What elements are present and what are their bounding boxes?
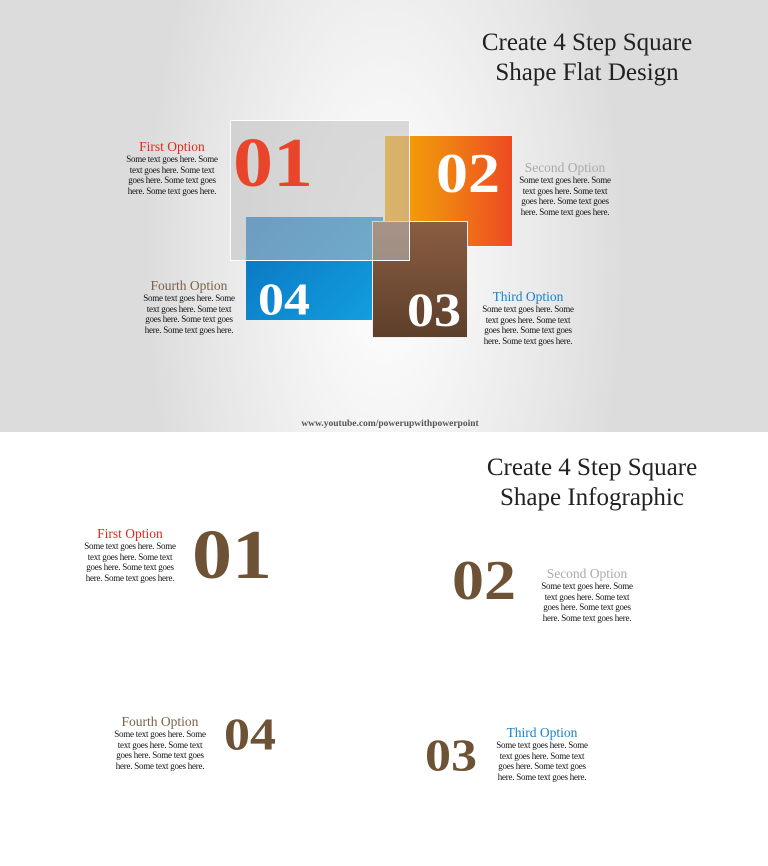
text: fourth option bottom: here. Some text goes here. (116, 761, 204, 771)
text: fourth option bottom: Some text goes here. Some (114, 729, 206, 739)
text: second option: goes here. Some text goes (521, 196, 609, 206)
text: second option (519, 160, 611, 217)
text: second option bottom: text goes here. Some text (545, 592, 629, 602)
title top: Create 4 Step Square Shape Flat Design (482, 29, 692, 86)
square: gray 01 (230, 120, 410, 261)
text: second option bottom: here. Some text goes here. (543, 613, 631, 623)
text: second option bottom: goes here. Some text goes (543, 602, 631, 612)
text: third option bottom: Third Option (507, 725, 577, 740)
square: orange 02 (385, 136, 512, 246)
text: first option bottom (84, 526, 176, 583)
text: fourth option bottom (114, 714, 206, 771)
number 02: 02 (436, 142, 500, 204)
text: first option: text goes here. Some text (130, 165, 214, 175)
text: third option: here. Some text goes here. (484, 336, 572, 346)
number 04 bottom: 04 (224, 710, 276, 760)
text: second option bottom: Second Option (547, 566, 627, 581)
url: www.youtube.com/powerupwithpowerpoint (301, 419, 479, 429)
number 03 bottom: 03 (425, 731, 477, 781)
text: third option bottom: text goes here. Some text (500, 751, 584, 761)
text: first option bottom: Some text goes here. Some (84, 541, 176, 551)
number 04: 04 (258, 275, 310, 325)
text: first option bottom: goes here. Some text goes (86, 562, 174, 572)
title bottom: Create 4 Step Square Shape Infographic (487, 454, 697, 511)
text: fourth option: here. Some text goes here. (145, 325, 233, 335)
text: third option: Third Option (493, 289, 563, 304)
text: third option bottom (496, 725, 588, 782)
text: first option bottom: text goes here. Some text (88, 552, 172, 562)
text: first option: First Option (139, 139, 205, 154)
text: fourth option: Some text goes here. Some (143, 293, 235, 303)
panel: top flat design (0, 0, 768, 432)
square: brown 03 (372, 221, 468, 338)
text: second option: Some text goes here. Some (519, 175, 611, 185)
number 02 bottom: 02 (452, 549, 516, 611)
text: second option: Second Option (525, 160, 605, 175)
text: first option bottom: here. Some text goes here. (86, 573, 174, 583)
text: first option: here. Some text goes here. (128, 186, 216, 196)
number 01: 01 (233, 125, 313, 202)
text: fourth option: Fourth Option (151, 278, 227, 293)
text: third option: text goes here. Some text (486, 315, 570, 325)
text: fourth option bottom: Fourth Option (122, 714, 198, 729)
text: first option bottom: First Option (97, 526, 163, 541)
text: fourth option bottom: goes here. Some text goes (116, 750, 204, 760)
number 03: 03 (407, 284, 461, 337)
text: third option bottom: here. Some text goes here. (498, 772, 586, 782)
text: second option: here. Some text goes here. (521, 207, 609, 217)
text: third option (482, 289, 574, 346)
text: fourth option: text goes here. Some text (147, 304, 231, 314)
square: blue 04 (246, 217, 383, 320)
text: first option: Some text goes here. Some (126, 154, 218, 164)
text: second option bottom (541, 566, 633, 623)
text: third option: goes here. Some text goes (484, 325, 572, 335)
text: first option (126, 139, 218, 196)
text: second option bottom: Some text goes here. Some (541, 581, 633, 591)
text: second option: text goes here. Some text (523, 186, 607, 196)
text: fourth option: goes here. Some text goes (145, 314, 233, 324)
panel: bottom infographic (84, 454, 697, 782)
text: third option: Some text goes here. Some (482, 304, 574, 314)
text: third option bottom: Some text goes here. Some (496, 740, 588, 750)
text: fourth option (143, 278, 235, 335)
text: fourth option bottom: text goes here. Some text (118, 740, 202, 750)
text: first option: goes here. Some text goes (128, 175, 216, 185)
number 01 bottom: 01 (192, 517, 272, 594)
text: third option bottom: goes here. Some text goes (498, 761, 586, 771)
